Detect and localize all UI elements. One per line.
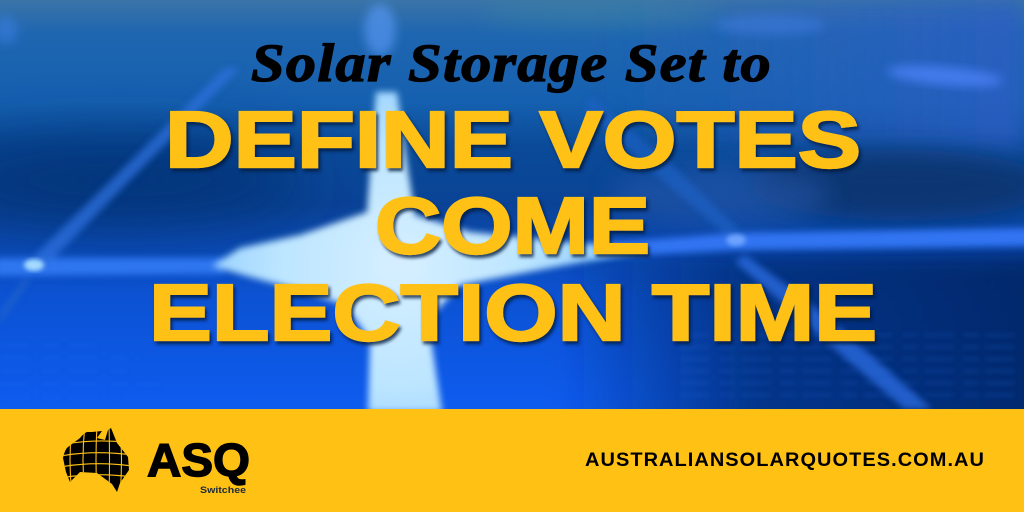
panel cell texture: [785, 334, 1013, 396]
bright panel junction: [212, 92, 650, 412]
website URL: AUSTRALIANSOLARQUOTES.COM.AU: [585, 450, 985, 471]
logo sub-brand: Switchee: Switchee: [200, 485, 246, 496]
subtitle: Solar Storage Set to: [251, 33, 772, 93]
footer band: [0, 409, 1024, 512]
title: [149, 95, 877, 357]
title line 1: DEFINE VOTES: [165, 95, 861, 184]
panel gridlines: [0, 68, 1024, 409]
title line 2: COME: [375, 181, 650, 270]
logo wordmark: ASQ: ASQ: [147, 434, 250, 486]
title line 3: ELECTION TIME: [149, 268, 877, 357]
icon: Australia solar grid logo: [63, 428, 129, 492]
